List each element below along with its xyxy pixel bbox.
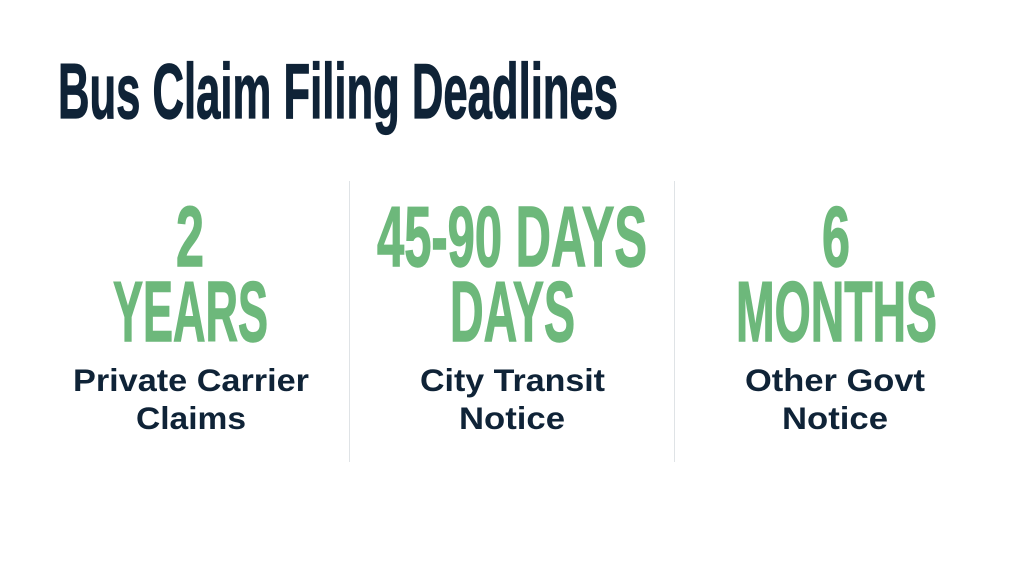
stat: 6 months: 6 — [822, 190, 850, 285]
label: other govt notice — [745, 362, 926, 436]
label: city transit notice: Notice — [459, 400, 565, 436]
label: private carrier claims: Private Carrier — [73, 362, 309, 398]
stat: 45-90 days: DAYS — [450, 265, 575, 360]
label: private carrier claims: Claims — [136, 400, 246, 436]
label: city transit notice: City Transit — [420, 362, 606, 398]
label: other govt notice: Other Govt — [745, 362, 926, 398]
panel: private carrier claims — [73, 190, 309, 436]
stat: 45-90 days: 45-90 DAYS — [377, 190, 647, 285]
panel: city transit notice — [377, 190, 647, 436]
label: city transit notice — [420, 362, 606, 436]
stat: 2 years: 2 — [176, 190, 204, 285]
stat: 6 months — [736, 190, 937, 360]
label: other govt notice: Notice — [782, 400, 888, 436]
label: private carrier claims — [73, 362, 309, 436]
panel: other govt notice — [736, 190, 937, 436]
stat: 2 years — [113, 190, 268, 360]
stat: 2 years: YEARS — [113, 265, 268, 360]
stat: 45-90 days — [377, 190, 647, 360]
